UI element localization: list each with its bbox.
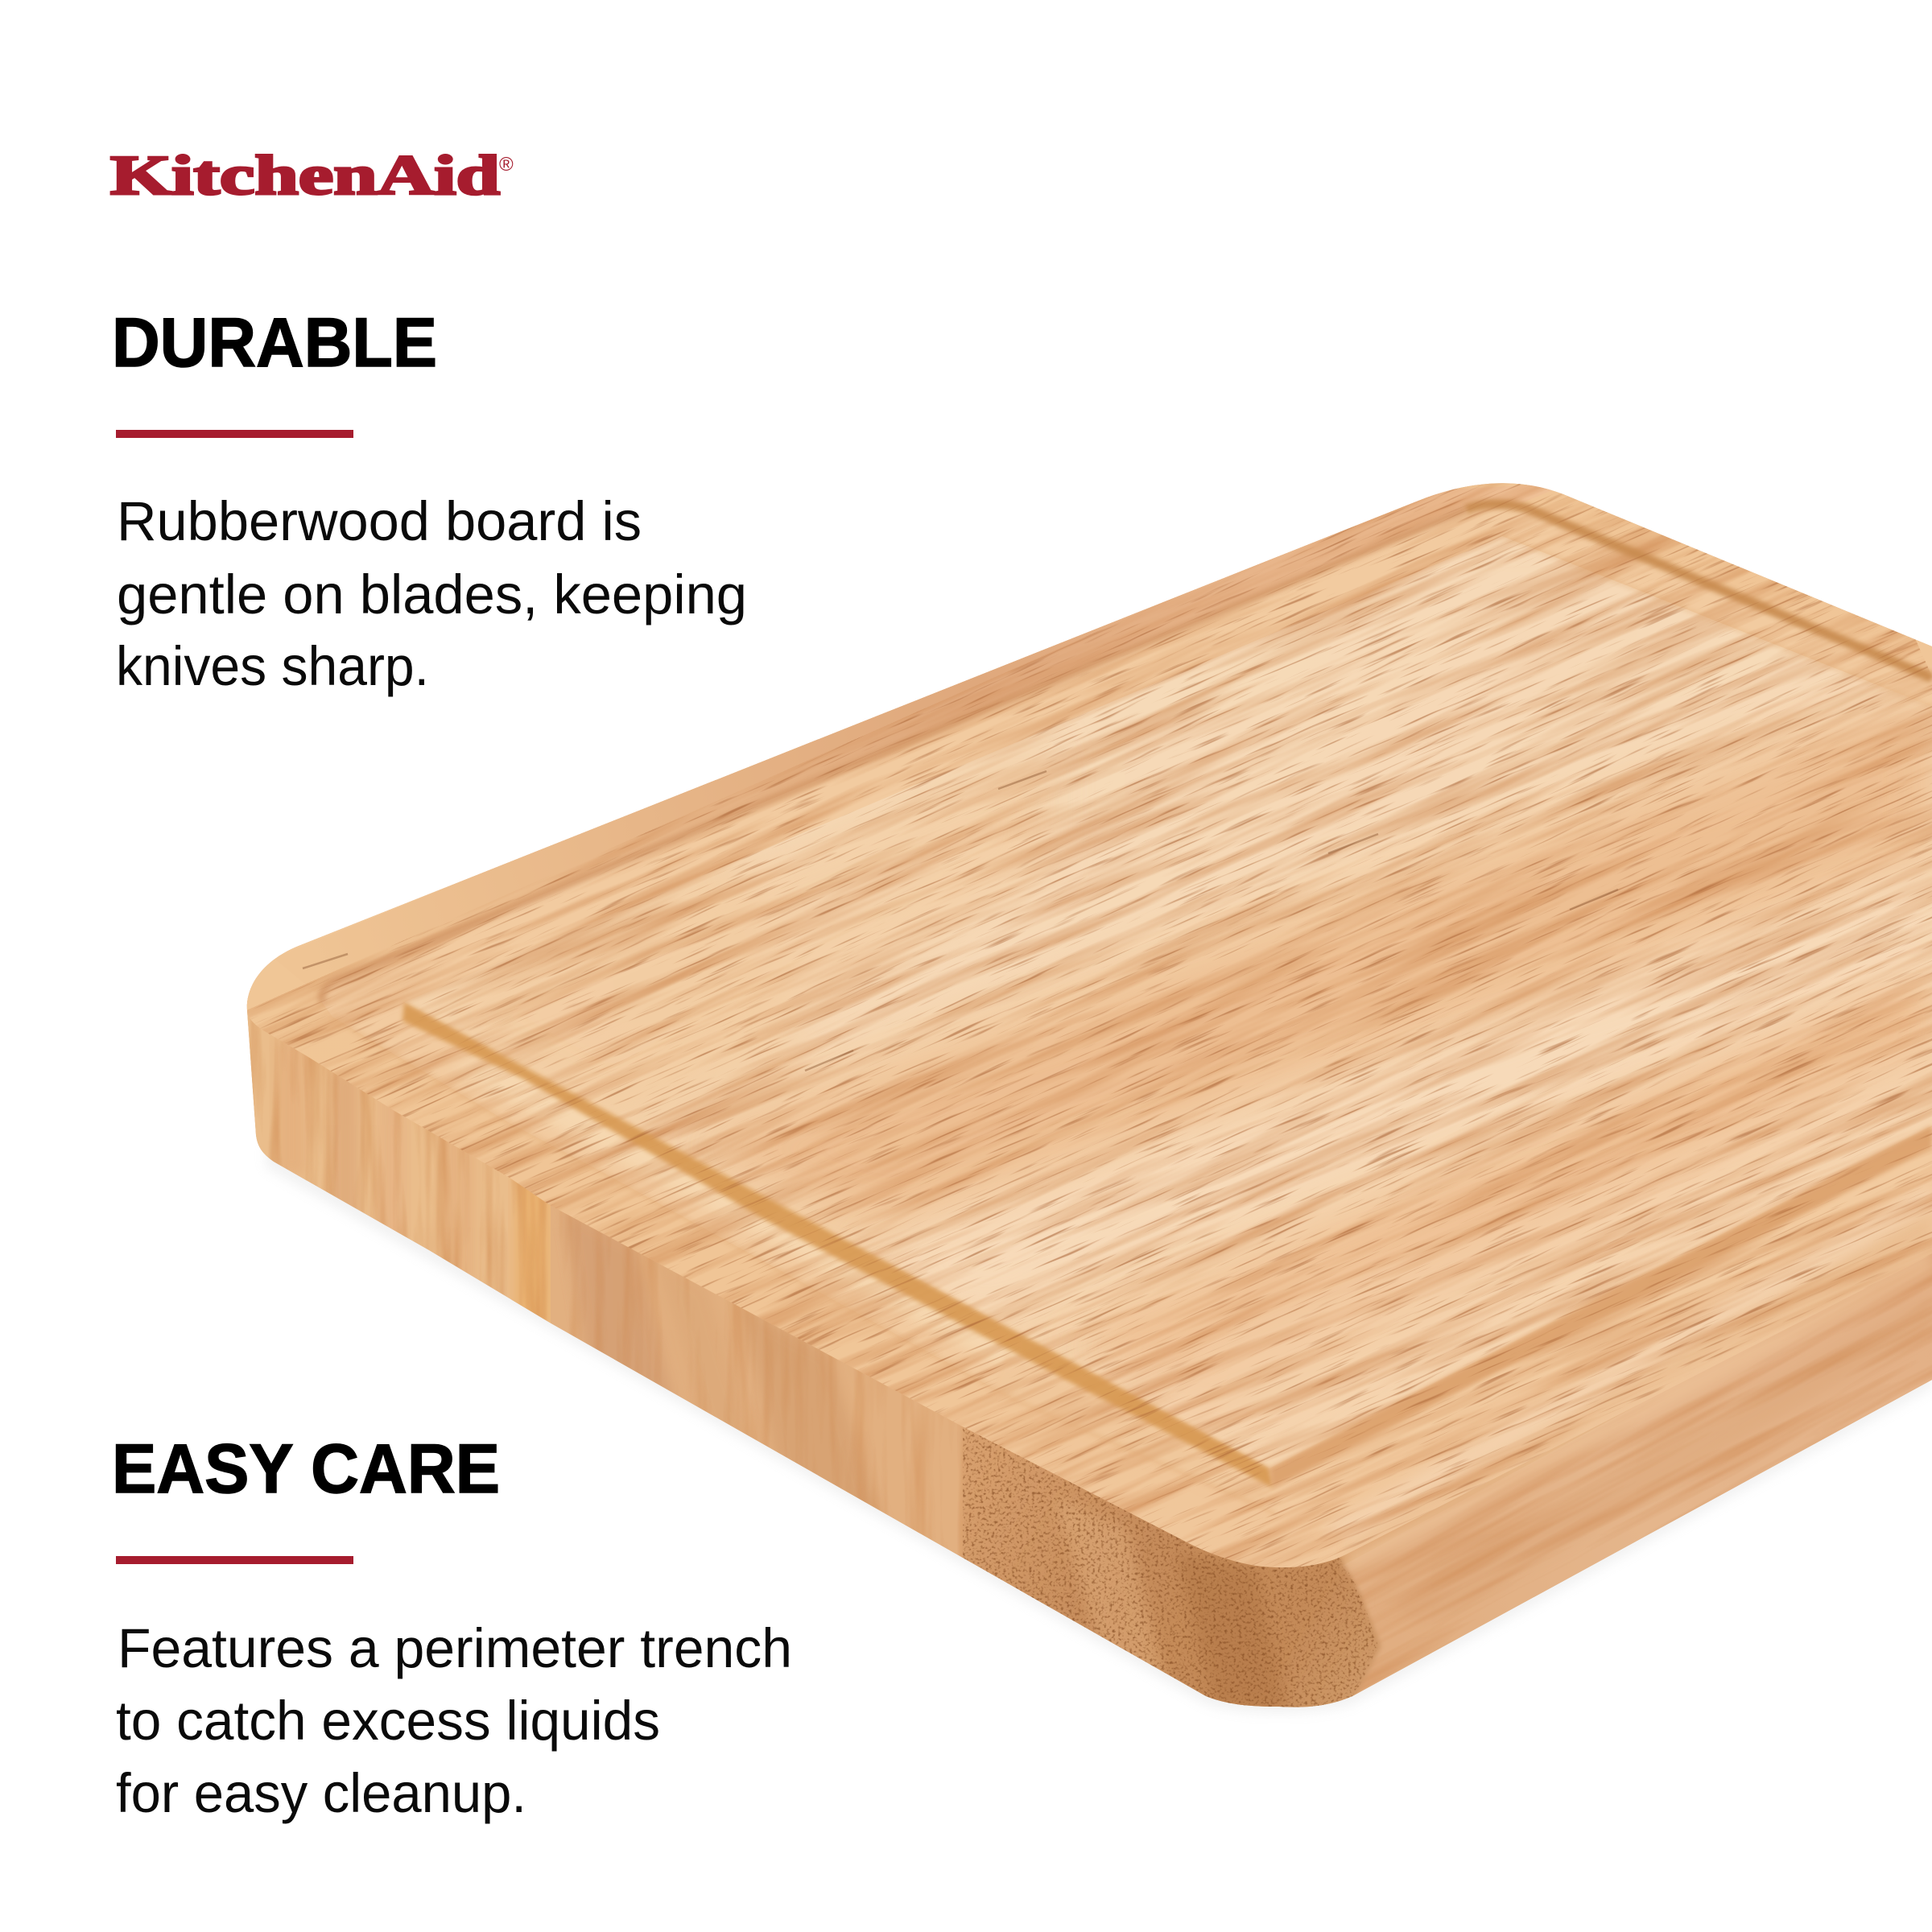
side: base tone under all faces	[242, 475, 1932, 1715]
trench: near lip shading	[332, 1017, 1276, 1513]
divider: durable	[116, 430, 353, 438]
trench: floor shade near bottom	[990, 1352, 1288, 1509]
trench: pale floor near left	[451, 1046, 1046, 1368]
trench: floor	[322, 504, 1932, 1513]
text block: durable description	[116, 490, 747, 697]
plateau: far-right edge	[1502, 536, 1932, 707]
wood grain: top face	[233, 329, 1932, 1877]
logo: KitchenAid: KitchenAid	[110, 145, 500, 207]
plateau: near-right wall	[1269, 1125, 1932, 1488]
side: center diagonal grain	[551, 1208, 969, 1562]
text block: durable description: Rubberwood board is	[117, 490, 642, 552]
rail: front highlights	[1541, 1219, 1930, 1438]
rail: far left, pink tone	[274, 483, 1570, 998]
edge: soft rounded rim on right face	[1346, 1260, 1932, 1562]
plateau: surface	[404, 536, 1932, 1468]
heading: durable: DURABLE	[112, 304, 437, 382]
trench: far-right wall	[1466, 504, 1932, 678]
grain: right face	[1343, 1255, 1932, 1690]
divider: easy care	[116, 1556, 353, 1564]
text block: easy care description: for easy cleanup.	[116, 1762, 526, 1824]
logo: KitchenAid: ®	[499, 154, 514, 175]
wood grain: ticks	[233, 329, 1932, 1877]
plateau: near-left wall	[402, 1002, 1273, 1488]
side: dark corner end grain	[963, 1417, 1381, 1715]
rail: top face	[242, 451, 1932, 1602]
side: long right face	[1320, 1232, 1932, 1731]
plateau: wood tone bands	[404, 515, 1932, 1468]
text block: easy care description	[116, 1617, 792, 1824]
logo: KitchenAid	[110, 145, 514, 207]
text block: easy care description: Features a perimeter trench	[118, 1617, 792, 1679]
text block: durable description: knives sharp.	[116, 635, 429, 697]
heading: easy care: EASY CARE	[112, 1430, 500, 1508]
text block: easy care description: to catch excess liquids	[116, 1690, 660, 1752]
wood: dark ticks	[303, 771, 1618, 1071]
trench: far-left wall	[322, 510, 1466, 1002]
side: left end grain	[242, 998, 559, 1336]
photo: rubberwood cutting board	[246, 483, 1932, 1711]
text block: durable description: gentle on blades, keeping	[117, 564, 747, 625]
